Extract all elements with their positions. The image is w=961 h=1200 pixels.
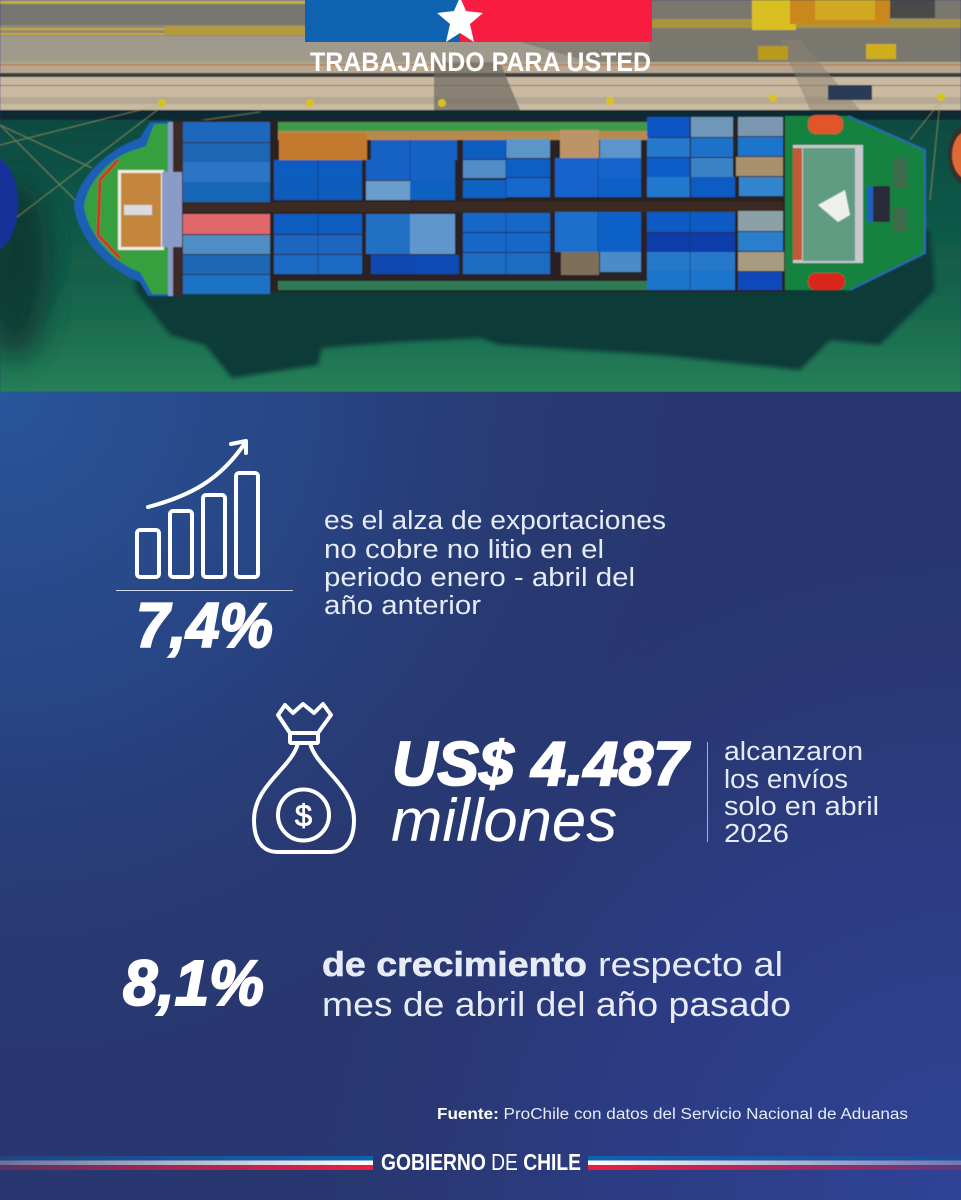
stat block: 8,1%	[123, 946, 791, 1024]
vertical divider	[707, 742, 708, 842]
bollards	[158, 93, 945, 107]
containers	[183, 117, 784, 294]
header flag	[305, 0, 652, 42]
stat block: US$ 4.487 millones	[254, 704, 879, 854]
description: año anterior	[324, 592, 482, 620]
description: alcanzaron	[724, 738, 863, 766]
description: de crecimiento	[322, 946, 587, 984]
figure: millones: millones	[391, 787, 617, 854]
figure: US$ 4.487: US$ 4.487	[392, 730, 691, 799]
ropes	[0, 102, 940, 230]
description	[322, 946, 791, 1024]
icon: rising bar chart	[137, 441, 258, 577]
description: mes de abril del año pasado	[322, 986, 791, 1024]
description: es el alza de exportaciones	[324, 507, 666, 535]
right tricolor stripe	[588, 1156, 961, 1170]
government wordmark: GOBIERNO DE CHILE	[381, 1149, 581, 1175]
ship hull	[74, 120, 787, 296]
icon: star	[437, 0, 483, 42]
icon: money bag: $	[295, 798, 312, 833]
description: periodo enero - abril del	[324, 564, 635, 592]
divider line	[116, 590, 293, 591]
main blue background	[0, 392, 961, 1200]
ship shadow	[0, 180, 935, 378]
description: no cobre no litio en el	[324, 536, 604, 564]
description: 2026	[724, 820, 789, 848]
ship stern	[785, 115, 925, 290]
description: respecto al	[598, 946, 783, 984]
footer	[0, 1154, 961, 1170]
harbour photo	[0, 0, 961, 392]
description: solo en abril	[724, 793, 879, 821]
stat block: 7,4%	[116, 441, 666, 661]
tugboats	[0, 125, 961, 250]
description: los envíos	[724, 766, 848, 794]
quay shadow	[0, 110, 961, 120]
figure: 8,1%: 8,1%	[123, 947, 264, 1019]
container seams	[318, 117, 690, 290]
description	[724, 738, 879, 848]
icon: money bag	[254, 704, 354, 852]
cranes	[752, 0, 935, 100]
left tricolor stripe	[0, 1156, 373, 1170]
pier	[0, 0, 961, 110]
water	[0, 110, 961, 392]
header title: TRABAJANDO PARA USTED	[310, 47, 651, 77]
source note: Fuente: ProChile con datos del Servicio Nacional de Aduanas	[437, 1106, 908, 1123]
figure: 7,4%: 7,4%	[136, 591, 273, 661]
description	[324, 507, 666, 620]
